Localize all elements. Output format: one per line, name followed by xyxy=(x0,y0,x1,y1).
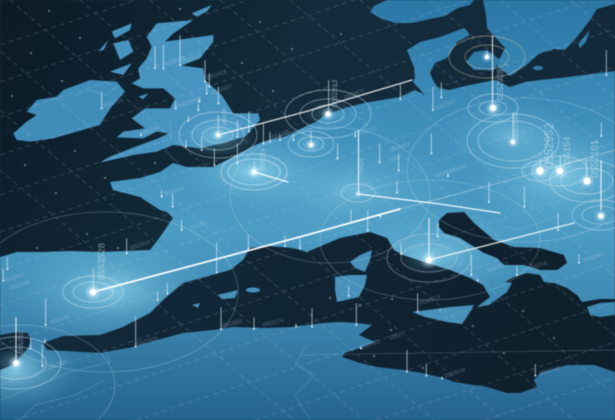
pin feet xyxy=(3,65,606,378)
Baltic islands xyxy=(466,30,590,70)
small coordinate labels: 0552650 xyxy=(221,319,243,330)
small coordinate labels: 0552181 xyxy=(49,314,71,327)
rings: lower-left node xyxy=(0,337,61,389)
rings: east nodes xyxy=(522,156,615,202)
rings: Denmark node xyxy=(449,36,525,78)
small coordinate labels: 0552174 xyxy=(262,318,284,329)
rings: France node xyxy=(221,154,287,190)
large range rings xyxy=(0,98,615,420)
small coordinate labels: 0552937 xyxy=(211,84,233,97)
rings: Italy node xyxy=(387,234,471,282)
small coordinate labels: 055294 xyxy=(142,125,161,137)
small coordinate labels: 055172 xyxy=(359,126,378,137)
dark sea: Mediterranean xyxy=(43,232,615,393)
line: England to Denmark xyxy=(218,80,412,135)
line: France branch xyxy=(254,172,288,182)
connection lines xyxy=(93,80,615,292)
small coordinate labels: 0552481 xyxy=(359,339,381,352)
British Isles xyxy=(13,5,260,163)
small coordinate labels: 0552871 xyxy=(344,88,366,101)
glow over England and France xyxy=(0,99,459,376)
vertical number labels: 055232 xyxy=(18,331,25,353)
rings: Alps node xyxy=(572,200,615,230)
rings: central node xyxy=(341,184,375,202)
vertical number labels: 0552813 xyxy=(332,80,339,107)
small coordinate labels: 0552764 xyxy=(9,280,31,292)
dark sea: lower left xyxy=(0,332,31,370)
dark sea: Adriatic strip xyxy=(439,212,567,270)
rings: north Germany node xyxy=(468,94,518,122)
vertical number labels: 055214 xyxy=(260,148,267,170)
rings: Netherlands node xyxy=(285,90,371,138)
small coordinate labels: 0552916 xyxy=(129,240,151,252)
Scottish islands xyxy=(98,5,212,99)
vertical number labels: 05524 xyxy=(359,158,365,175)
small coordinate labels: 0552617 xyxy=(487,262,509,274)
small coordinate labels: 0552713 xyxy=(419,295,441,307)
rings: Iberia node xyxy=(63,276,123,308)
vertical number labels: 0552928 xyxy=(496,68,505,100)
rings: Belgium node xyxy=(288,131,334,157)
small coordinate labels: 0552426 xyxy=(206,69,228,82)
small coordinate labels: 05527421 xyxy=(134,336,159,349)
small coordinate labels: 0552903 xyxy=(389,142,411,154)
line: central branch xyxy=(358,194,500,213)
dark sea: Atlantic, North Sea and Baltic xyxy=(0,0,615,257)
small coordinate labels xyxy=(5,54,605,380)
bright stems xyxy=(16,35,601,363)
Ireland xyxy=(13,80,125,142)
vertical number labels: 0553528 xyxy=(96,243,108,280)
vertical number labels xyxy=(18,68,601,353)
rings: central Germany node xyxy=(467,114,559,168)
vertical number labels: 055154 xyxy=(562,136,573,168)
line: Iberia to centre xyxy=(93,209,400,292)
small coordinate labels: 0552 xyxy=(389,154,402,164)
line: extension to the east xyxy=(400,150,615,209)
small coordinate labels: 0552718 xyxy=(102,98,124,110)
small coordinate labels: 0552614 xyxy=(434,168,456,180)
land glows xyxy=(0,95,615,410)
Mediterranean islands xyxy=(192,250,474,324)
small coordinate labels: 0552539 xyxy=(47,359,69,372)
rings: England node xyxy=(179,112,257,158)
vertical number labels: 0552952 xyxy=(544,123,556,168)
vertical number labels: 05528 xyxy=(222,108,228,125)
small coordinate labels: 0552347 xyxy=(435,99,457,112)
small coordinate labels: 0552846 xyxy=(583,252,605,264)
glowing nodes xyxy=(8,51,608,371)
small coordinate labels: 0552185 xyxy=(269,129,291,142)
line: Italy to east xyxy=(429,223,574,260)
small coordinate labels: 0552639 xyxy=(444,368,466,380)
small coordinate labels: 0552641 xyxy=(164,185,186,198)
grid intersection dots xyxy=(11,8,555,369)
small coordinate labels: 05525861 xyxy=(177,97,202,110)
small coordinate labels: 055248 xyxy=(449,164,468,175)
vertical number labels: 0552101 xyxy=(590,140,601,178)
small coordinate labels: 0552648 xyxy=(165,56,187,68)
small coordinate labels: 055294 xyxy=(189,221,208,232)
vertical number labels: 0552640 xyxy=(513,113,520,140)
small coordinate labels: 0552148 xyxy=(539,365,561,377)
small coordinate labels: 055293 xyxy=(5,273,24,284)
small coordinate labels: 055218 xyxy=(529,261,548,272)
small coordinate labels: 0552 xyxy=(389,332,402,342)
faint borders xyxy=(0,85,615,420)
small coordinate labels: 0552713 xyxy=(181,54,203,66)
Great Britain xyxy=(100,20,260,163)
